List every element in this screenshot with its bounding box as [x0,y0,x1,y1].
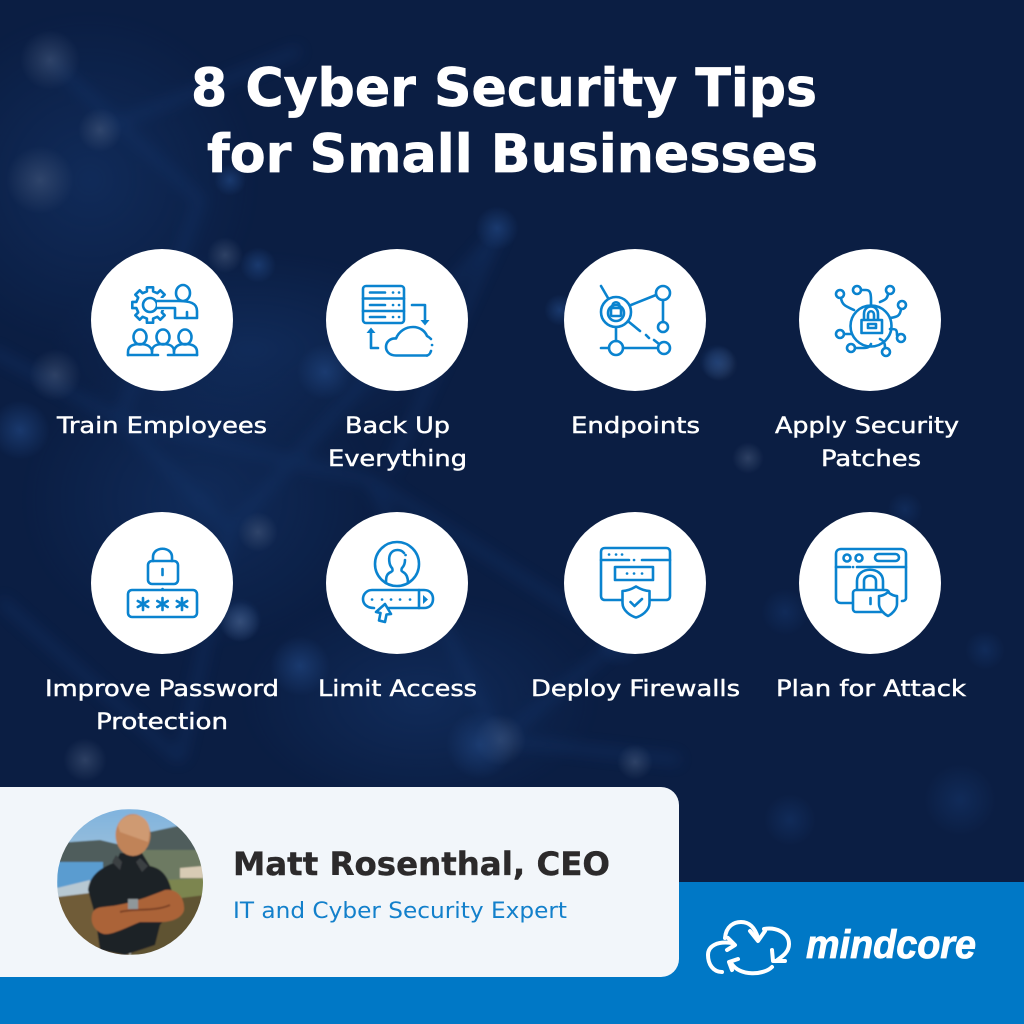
job title: IT and Cyber Security Expert [233,899,567,924]
portrait photo [57,809,205,955]
logo icon: cloud of arrows [708,922,789,973]
icon: browser with padlock and shield [836,549,906,616]
label: Improve Password [45,677,279,702]
label: Train Employees [56,414,267,439]
tip: Limit Access [318,512,477,702]
logo wordmark: mindcore [806,923,976,967]
icon: browser window with shield [601,548,670,618]
tip: Apply Security Patches [775,249,959,472]
label: Plan for Attack [776,677,966,702]
icon: gear and trainer with team [128,285,197,355]
icon: network with padlock [601,286,670,355]
name: Matt Rosenthal, CEO [233,845,610,883]
title: 8 Cyber Security Tips [191,58,817,119]
title: for Small Businesses [207,124,818,185]
label: Apply Security [775,414,959,439]
label [45,677,279,735]
label: Everything [328,447,467,472]
tip: Endpoints [564,249,706,439]
bottom blue band [0,882,1024,1024]
label: Endpoints [571,414,700,439]
title [191,58,818,185]
icon: padlock and password field [128,549,197,617]
icon: server and cloud backup [363,286,432,356]
icon: circuit padlock [836,286,906,356]
tip: Deploy Firewalls [531,512,740,702]
label: Back Up [345,414,450,439]
label [328,414,467,472]
tip: Train Employees [56,249,267,439]
icon: user profile and login bar [363,542,433,622]
tip: Improve Password Protection [45,512,279,735]
tip: Plan for Attack [776,512,966,702]
label [775,414,959,472]
label: Patches [821,447,921,472]
label: Protection [96,710,228,735]
panel: CEO card [0,787,679,977]
label: Limit Access [318,677,477,702]
logo: mindcore [708,922,976,973]
tip: Back Up Everything [326,249,468,472]
label: Deploy Firewalls [531,677,740,702]
